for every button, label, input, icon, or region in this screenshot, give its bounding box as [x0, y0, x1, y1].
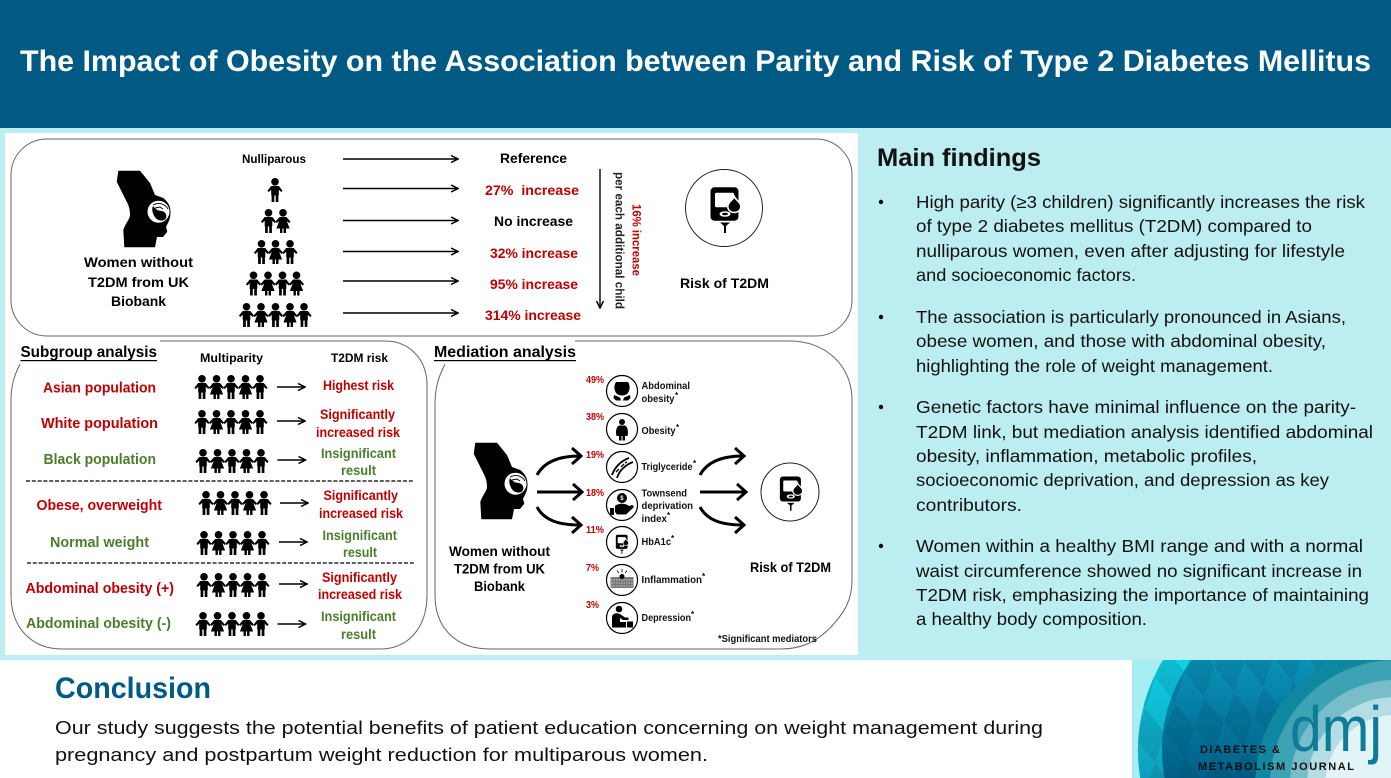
- arrow: trend per child: [599, 169, 601, 308]
- text: study population: T2DM from UK: [454, 560, 545, 576]
- risk results: 314% increase: [485, 307, 581, 323]
- risk results: Reference: [500, 150, 567, 166]
- finding 3: contributors.: [916, 495, 1022, 515]
- arrows: mediators to risk: [700, 448, 746, 533]
- finding 1: nulliparous women, even after adjusting for lifestyle: [916, 241, 1345, 261]
- mediator percentages: 19%: [586, 450, 604, 461]
- column headers: T2DM risk: [331, 351, 388, 365]
- label: risk of T2DM: Risk of T2DM: [750, 559, 831, 575]
- dashed separators: [26, 481, 415, 563]
- text: study population: T2DM from UK: [88, 274, 189, 290]
- subgroup labels: Asian population: [43, 380, 156, 396]
- text block: conclusion: pregnancy and postpartum weight reduction for multiparous women.: [55, 745, 708, 765]
- mediator percentages: 49%: [586, 375, 604, 386]
- subgroup results: Insignificant: [321, 445, 396, 461]
- finding 2: [879, 307, 1346, 376]
- text block: conclusion: Our study suggests the potential benefits of patient education concerning on weight management during: [55, 718, 1043, 738]
- finding 1: High parity (≥3 children) significantly increases the risk: [916, 192, 1365, 212]
- label: nulliparous: Nulliparous: [242, 152, 306, 166]
- column headers: [200, 351, 388, 365]
- mediator labels: Depression: [642, 612, 691, 624]
- subgroup results: result: [343, 544, 377, 560]
- icon: HbA1c: [606, 526, 638, 558]
- logo: Diabetes and Metabolism Journal: dmj: [1290, 693, 1382, 765]
- subgroup results: Insignificant: [321, 608, 396, 624]
- panel: parity and risk: [11, 139, 852, 336]
- subgroup results: Significantly: [320, 406, 395, 422]
- logo: Diabetes and Metabolism Journal: [1132, 660, 1391, 778]
- mediator labels: index: [642, 513, 667, 525]
- text: study population: [84, 254, 193, 309]
- subgroup arrows: [277, 387, 308, 624]
- mediator labels: HbA1c: [642, 536, 671, 548]
- mediator labels: *: [691, 610, 695, 619]
- finding 3: socioeconomic deprivation, and depression as key: [916, 470, 1329, 490]
- risk results: No increase: [494, 213, 573, 229]
- mediator labels: *: [667, 511, 671, 520]
- text: study population: Women without: [449, 543, 550, 559]
- subgroup labels: Obese, overweight: [36, 498, 162, 514]
- panel: subgroup analysis: [11, 341, 427, 649]
- risk results: [485, 150, 581, 323]
- subgroup labels: Black population: [44, 452, 156, 468]
- finding 2: obese women, and those with abdominal obesity,: [916, 331, 1326, 351]
- finding 4: Women within a healthy BMI range and with a normal: [916, 536, 1363, 556]
- subgroup results: increased risk: [319, 505, 403, 521]
- mediator percentages: 18%: [586, 488, 604, 499]
- mediator labels: Obesity: [642, 425, 676, 437]
- risk results: 32% increase: [490, 245, 578, 261]
- finding 3: [879, 397, 1373, 515]
- subgroup results: Significantly: [322, 569, 397, 585]
- icon: abdominal obesity: [606, 376, 638, 406]
- text: study population: Women without: [84, 254, 193, 270]
- subgroup results: [316, 377, 403, 642]
- panel: mediation analysis: [434, 341, 852, 649]
- finding 1: of type 2 diabetes mellitus (T2DM) compared to: [916, 216, 1312, 236]
- heading: mediation analysis: Mediation analysis: [434, 344, 576, 361]
- subgroup results: Significantly: [324, 487, 398, 503]
- column headers: Multiparity: [200, 351, 263, 365]
- finding 4: T2DM risk, emphasizing the importance of maintaining: [916, 585, 1369, 605]
- finding 4: a healthy body composition.: [916, 609, 1147, 629]
- risk results: 95% increase: [490, 276, 578, 292]
- label: risk of T2DM: Risk of T2DM: [680, 275, 769, 291]
- text: study population: [449, 543, 550, 594]
- mediator labels: *: [671, 534, 675, 543]
- finding 2: The association is particularly pronounced in Asians,: [916, 307, 1346, 327]
- title banner: [0, 0, 1391, 128]
- label: per each additional child: per each additional child: [612, 172, 626, 309]
- mediator labels: deprivation: [642, 500, 693, 512]
- finding 4: [879, 536, 1369, 629]
- logo: Diabetes and Metabolism Journal: DIABETES &: [1200, 744, 1280, 756]
- subgroup labels: [26, 380, 174, 632]
- multiparity figures: [194, 375, 272, 636]
- heading: conclusion: Conclusion: [55, 672, 211, 705]
- finding 2: highlighting the role of weight management.: [916, 356, 1273, 376]
- arrows: exposure to mediators: [537, 448, 582, 533]
- icon: inflammation: [606, 564, 638, 596]
- mediator labels: Inflammation: [642, 574, 702, 586]
- subgroup results: result: [341, 626, 376, 642]
- mediator labels: *: [693, 459, 697, 468]
- mediator labels: [642, 380, 706, 624]
- text: study population: Biobank: [111, 293, 166, 309]
- mediator labels: *: [676, 423, 680, 432]
- subgroup labels: White population: [41, 416, 158, 432]
- subgroup labels: Abdominal obesity (+): [26, 581, 174, 597]
- mediator percentages: 38%: [586, 412, 604, 423]
- subgroup labels: Abdominal obesity (-): [26, 616, 171, 632]
- page background: [0, 128, 1391, 660]
- finding 1: and socioeconomic factors.: [916, 265, 1136, 285]
- mediator percentages: 3%: [586, 600, 599, 611]
- mediator labels: *: [702, 572, 706, 581]
- mediator percentages: [586, 375, 604, 611]
- mediator icons: [606, 376, 638, 634]
- subgroup results: Highest risk: [323, 377, 394, 393]
- arrows: parity to risk: [343, 159, 458, 313]
- label: 16% increase: 16% increase: [630, 204, 644, 276]
- icon: Townsend deprivation index: [606, 490, 638, 520]
- subgroup results: increased risk: [316, 424, 400, 440]
- finding 1: [879, 192, 1365, 285]
- mediator labels: Abdominal: [642, 380, 690, 392]
- icon: pregnant woman: [474, 443, 528, 519]
- text block: conclusion: [55, 718, 1043, 765]
- mediator labels: obesity: [642, 393, 675, 405]
- title banner: The Impact of Obesity on the Association between Parity and Risk of Type 2 Diabetes Mellitus: [20, 45, 1371, 78]
- finding 3: obesity, inflammation, metabolic profiles,: [916, 446, 1257, 466]
- icon: glucose meter: [686, 170, 762, 246]
- logo: Diabetes and Metabolism Journal: METABOLISM JOURNAL: [1198, 761, 1354, 773]
- mediator percentages: 11%: [586, 525, 604, 536]
- subgroup labels: Normal weight: [50, 535, 149, 551]
- risk results: 27% increase: [485, 182, 579, 198]
- heading: main findings: Main findings: [877, 144, 1041, 172]
- icon: Townsend deprivation index: $: [620, 496, 624, 502]
- icon: glucose meter: [761, 463, 819, 521]
- heading: subgroup analysis: Subgroup analysis: [20, 344, 157, 361]
- icon: triglyceride: [606, 452, 638, 482]
- text block: main findings list: [879, 192, 1373, 629]
- mediator labels: Townsend: [642, 488, 687, 500]
- white graphic area: [5, 133, 858, 655]
- icon: pregnant woman: [117, 171, 170, 247]
- mediator labels: *: [675, 391, 679, 400]
- finding 4: waist circumference showed no significant increase in: [915, 561, 1362, 581]
- icon: depression: [606, 602, 638, 634]
- subgroup results: result: [341, 462, 376, 478]
- finding 3: Genetic factors have minimal influence on the parity-: [916, 397, 1356, 417]
- finding 3: T2DM link, but mediation analysis identified abdominal: [916, 422, 1373, 442]
- mediator percentages: 7%: [586, 563, 599, 574]
- text: study population: Biobank: [474, 578, 525, 594]
- subgroup results: Insignificant: [322, 527, 397, 543]
- icon: obesity: [606, 414, 638, 444]
- footnote: significant mediators: *Significant mediators: [718, 633, 817, 645]
- icon: parity pyramid: [239, 178, 312, 327]
- mediator labels: Triglyceride: [642, 461, 693, 473]
- subgroup results: increased risk: [318, 586, 402, 602]
